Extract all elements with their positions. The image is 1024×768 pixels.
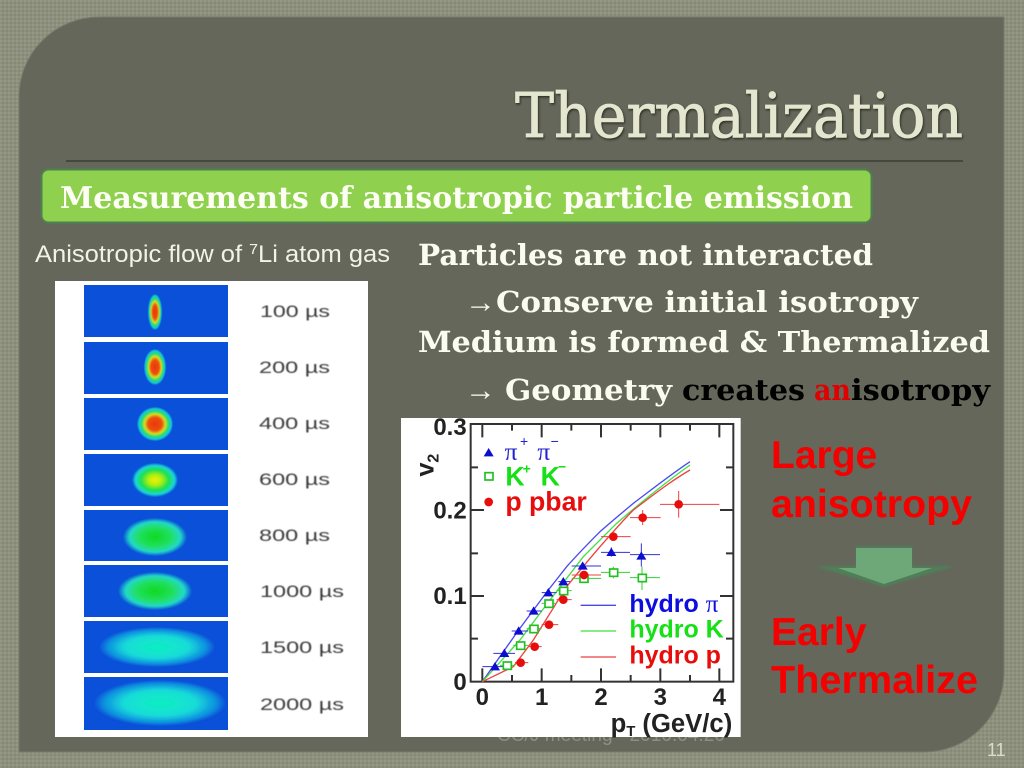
legend: hydro: hydro p [629, 641, 721, 669]
chart: v2 vs pT [401, 414, 741, 740]
green data [500, 567, 660, 665]
callout: early thermalize: Thermalize [771, 659, 978, 702]
text block: particles [418, 238, 991, 407]
text block: particles: → [465, 374, 496, 407]
legend: particles: K [505, 461, 525, 491]
axis labels: 2 [594, 684, 608, 711]
callout: early thermalize: Early [771, 611, 867, 654]
legend: particles: π [505, 438, 518, 466]
callout: large anisotropy: Large [771, 434, 877, 477]
axis labels: 2 [426, 454, 443, 463]
legend: hydro: hydro π [629, 590, 719, 618]
text block: particles: → [465, 286, 496, 319]
legend: particles: − [551, 433, 559, 449]
axis labels: 0 [453, 669, 467, 696]
text block: particles: Geometry [505, 373, 673, 407]
image: atom gas time series: 2000 µs [260, 696, 344, 714]
legend: particles: π [537, 438, 550, 466]
text block: particles: isotropy [851, 373, 991, 407]
text block: particles: an [814, 373, 851, 407]
axis labels: v [411, 463, 439, 477]
callout: large anisotropy: anisotropy [771, 483, 972, 526]
image: atom gas time series: 600 µs [259, 471, 330, 489]
axis labels: 0.1 [433, 583, 467, 610]
axis labels: 3 [654, 684, 667, 711]
legend: particles: + [523, 460, 531, 476]
axis labels: 0.3 [433, 414, 467, 441]
caption: anisotropic flow: Li atom gas [258, 241, 390, 268]
axis labels: 0 [476, 684, 489, 711]
text block: particles: Medium is formed & Thermalized [418, 325, 990, 359]
legend: particles [484, 433, 587, 517]
axis labels: T [626, 724, 635, 740]
legend: particles: p pbar [505, 487, 587, 517]
arrow: down [815, 546, 955, 587]
axis labels: (GeV/c) [635, 710, 732, 738]
legend: hydro: hydro K [629, 615, 724, 643]
legend: particles: K [541, 461, 560, 491]
axis labels: p [611, 710, 626, 738]
plot frame [471, 424, 733, 682]
caption: anisotropic flow: Anisotropic flow of [35, 241, 230, 268]
legend: particles: − [558, 459, 566, 475]
image: atom gas time series: 100 µs [260, 303, 330, 321]
axis labels: 0.2 [433, 497, 467, 524]
red data [515, 491, 719, 663]
axis labels: 1 [535, 684, 548, 711]
axis labels [411, 414, 732, 740]
axis labels: 4 [713, 684, 727, 711]
heading banner [42, 170, 872, 222]
image: atom gas time series: 1000 µs [260, 583, 344, 601]
text block: particles: Particles are not interacted [418, 238, 873, 272]
callout: large anisotropy [771, 434, 972, 526]
footer text: CC/J meeting - 2010.04.20 [497, 725, 725, 746]
heading banner: Measurements of anisotropic particle emission [60, 181, 853, 216]
blue data [482, 543, 660, 667]
image: atom gas time series [55, 281, 368, 737]
image: atom gas time series: 200 µs [259, 359, 330, 377]
image: atom gas time series: 800 µs [259, 527, 330, 545]
text block: particles: creates [682, 373, 805, 407]
image: atom gas time series: 400 µs [259, 415, 330, 433]
title: Thermalization [515, 79, 963, 152]
text block: particles: Conserve initial isotropy [496, 285, 919, 319]
page number: 11 [987, 740, 1006, 760]
callout: early thermalize [771, 611, 978, 702]
image: atom gas time series: 1500 µs [260, 639, 344, 657]
legend: particles: + [520, 433, 528, 449]
hydro curves [482, 462, 690, 682]
caption: anisotropic flow: 7 [249, 241, 258, 258]
legend: hydro [581, 590, 724, 669]
